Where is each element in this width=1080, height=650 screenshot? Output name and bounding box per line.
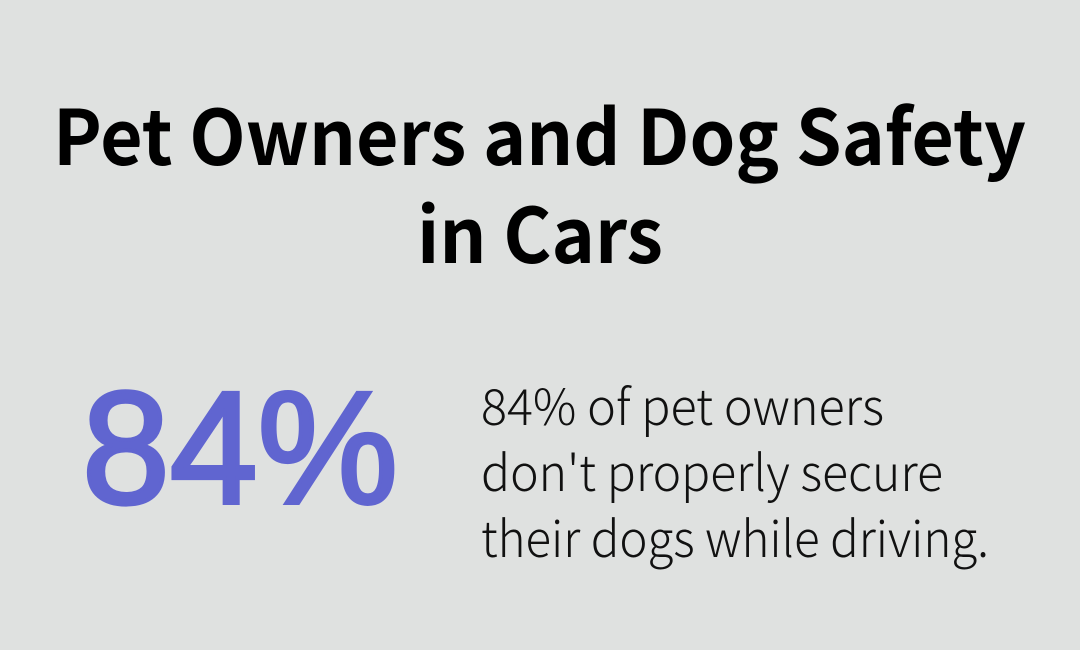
description text: don't properly secure <box>481 434 943 506</box>
big statistic: 84%: 84% <box>82 358 398 537</box>
description text <box>481 368 989 572</box>
description text: 84% of pet owners <box>481 368 884 440</box>
title <box>53 77 1026 285</box>
description text: their dogs while driving. <box>481 500 989 572</box>
title: in Cars <box>417 175 663 285</box>
title: Pet Owners and Dog Safety <box>53 77 1026 187</box>
